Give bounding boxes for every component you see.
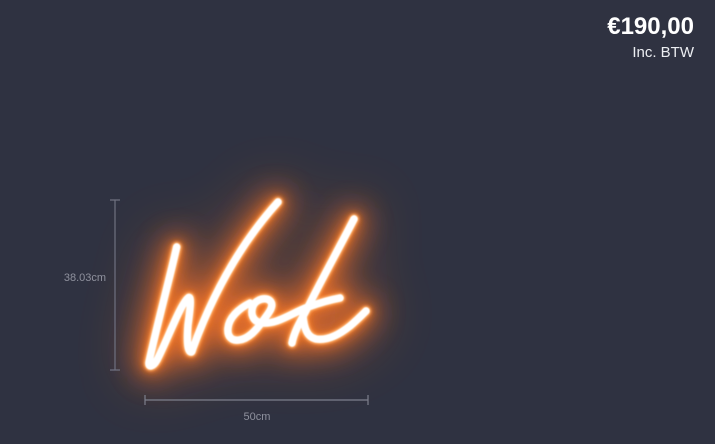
width label: 50cm xyxy=(244,411,270,423)
tax note: Inc. BTW xyxy=(632,44,694,61)
price block xyxy=(607,13,694,61)
height label: 38.03cm xyxy=(64,272,106,284)
width dimension line xyxy=(145,395,368,405)
price amount: €190,00 xyxy=(607,13,694,40)
neon glow xyxy=(149,202,366,366)
height dimension line xyxy=(110,200,120,370)
